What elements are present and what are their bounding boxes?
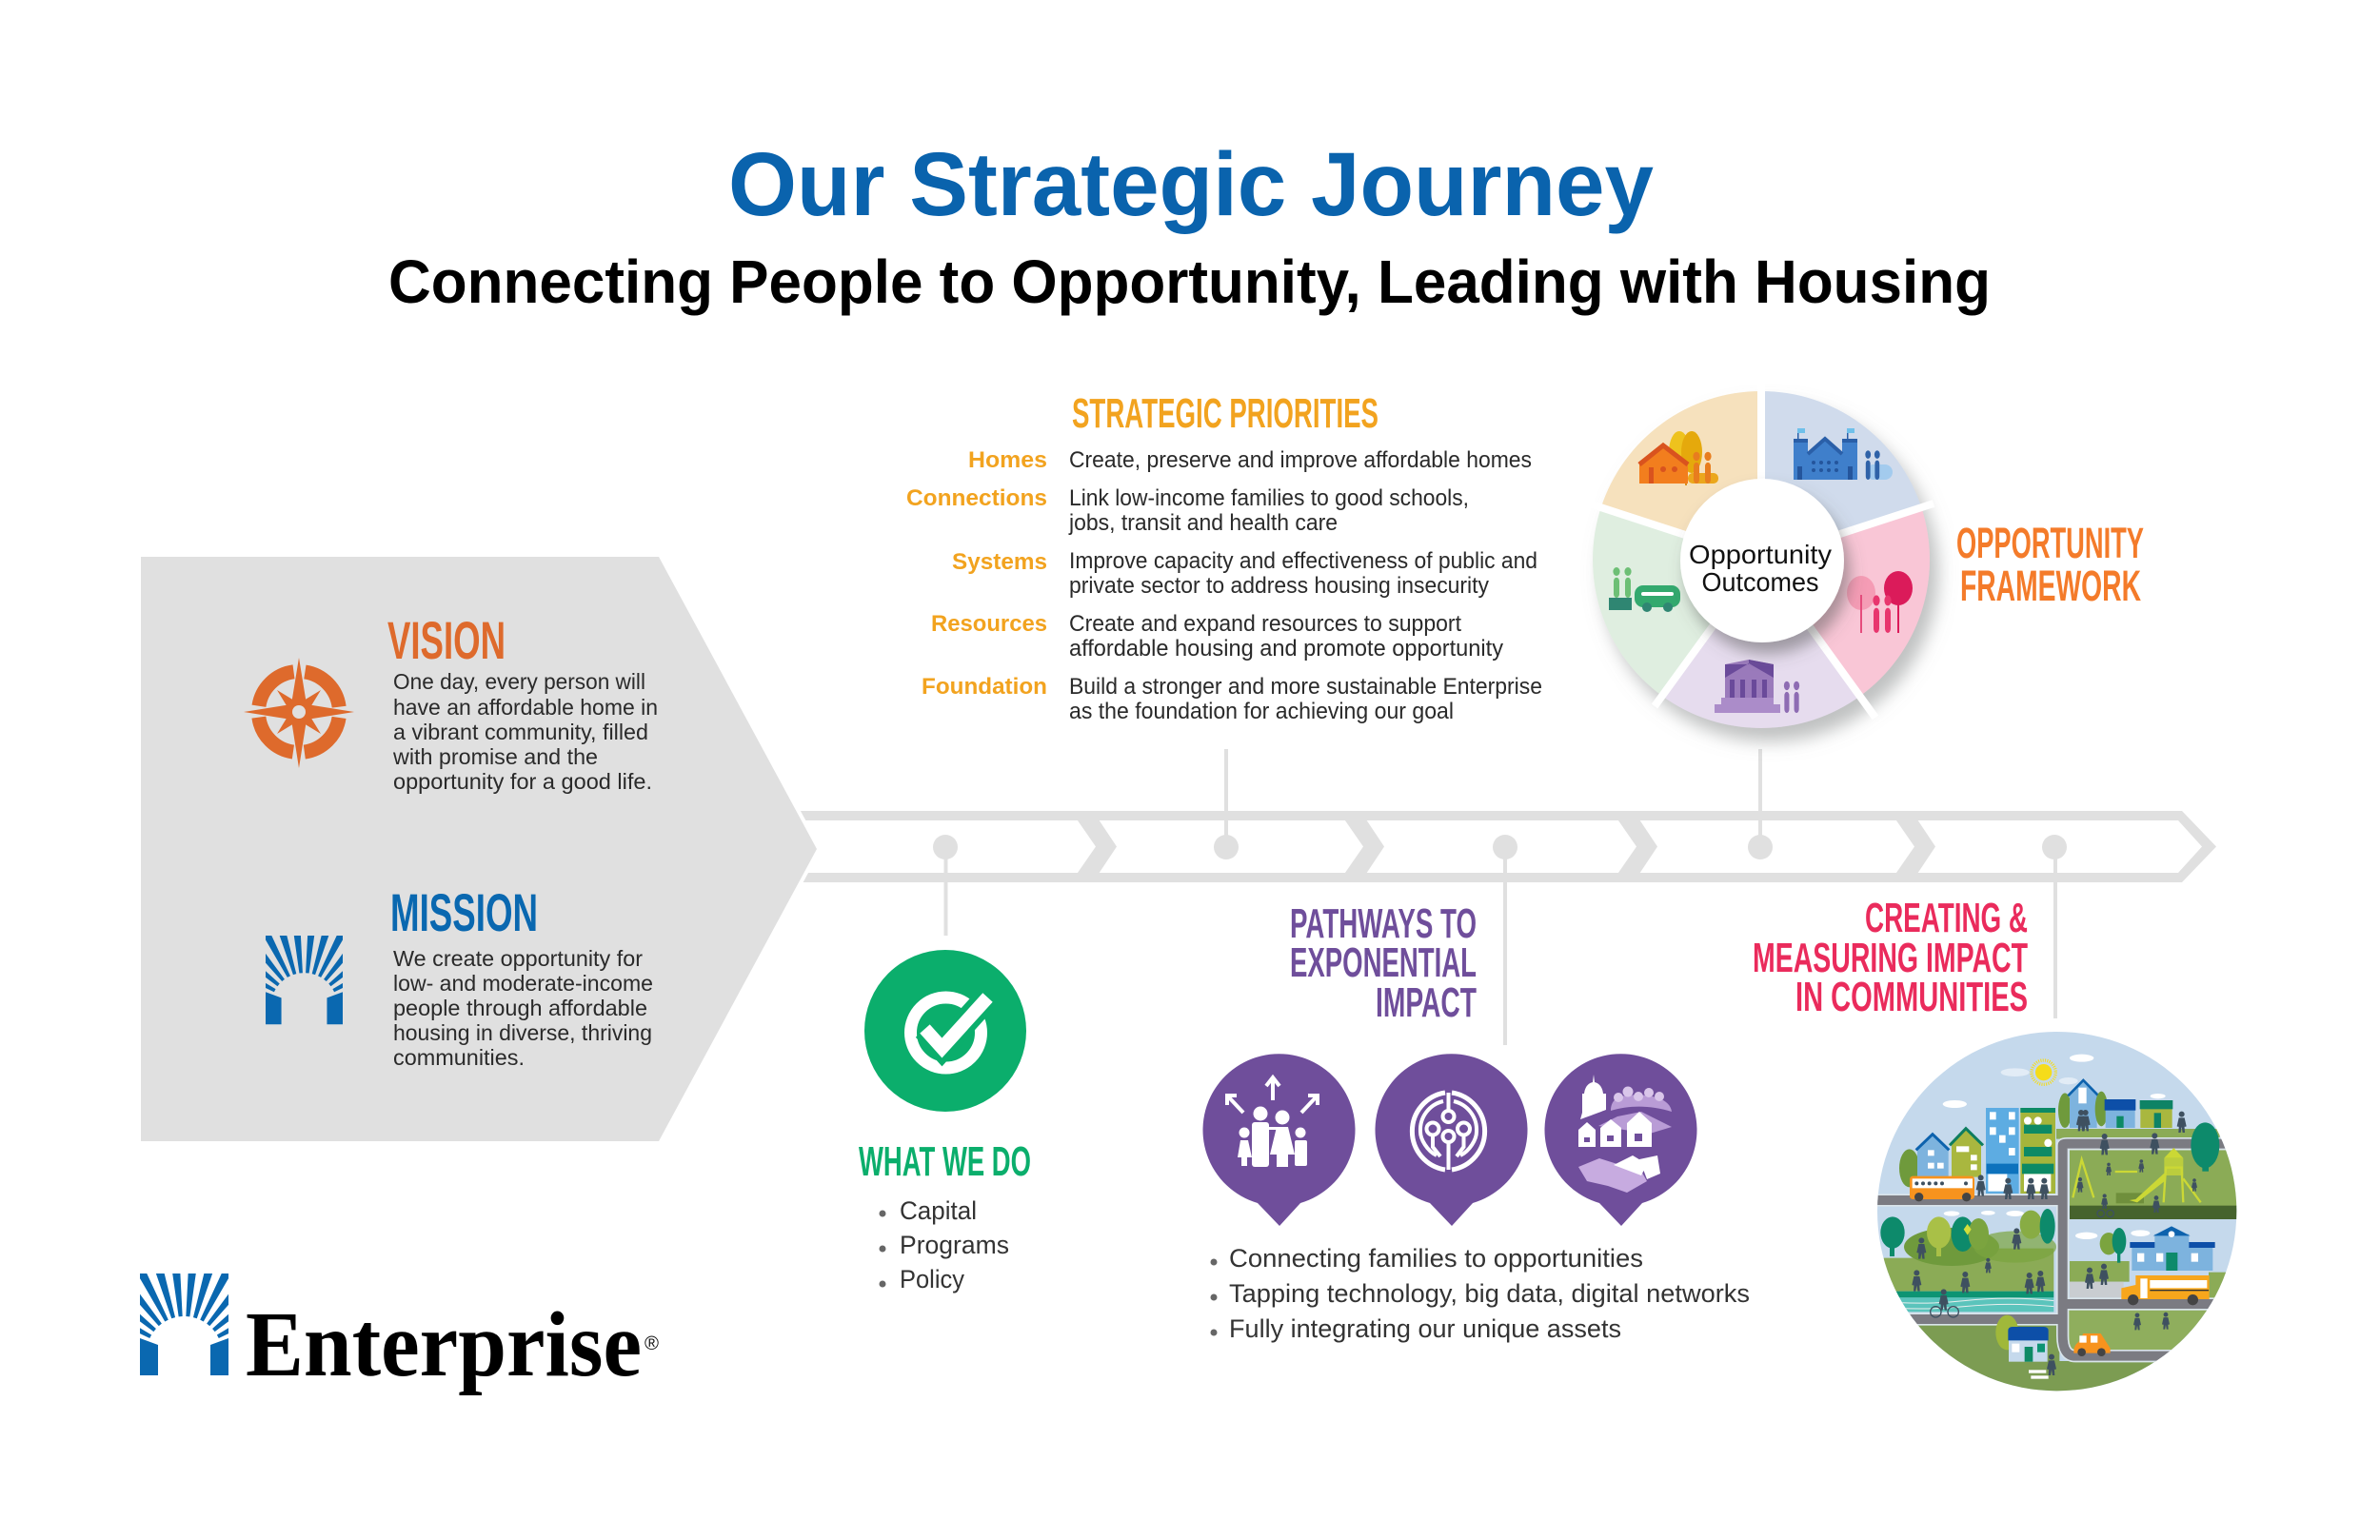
text: mission: low- and moderate-income: [393, 971, 653, 996]
list: pathways: Tapping technology, big data, digital networks: [1229, 1279, 1750, 1308]
school and bus: [2100, 1226, 2215, 1305]
heading: pathways to exponential impact: [1290, 900, 1477, 1026]
priority labels: Systems: [952, 549, 1047, 575]
priority descriptions: Create, preserve and improve affordable homes: [1069, 447, 1532, 473]
roads: [1875, 1144, 2240, 1356]
icon: circuit: [1412, 1093, 1485, 1170]
heading: opportunity framework: OPPORTUNITY: [1956, 519, 2144, 567]
icon: enterprise arch small: [191, 881, 417, 1024]
priority descriptions: jobs, transit and health care: [1068, 510, 1338, 536]
top houses: [2058, 1080, 2219, 1172]
heading: what we do: WHAT WE DO: [859, 1138, 1031, 1185]
panel: vision and mission: [141, 557, 817, 1141]
list: what we do: [880, 1196, 1009, 1293]
text: mission: people through affordable: [393, 996, 647, 1020]
park and playground: [2073, 1148, 2201, 1203]
heading: opportunity framework: [1956, 519, 2144, 610]
heading: opportunity framework: FRAMEWORK: [1960, 562, 2141, 610]
priority descriptions: Improve capacity and effectiveness of public and: [1069, 548, 1537, 574]
list: what we do: Capital: [900, 1196, 977, 1225]
priority descriptions: Create and expand resources to support: [1069, 611, 1461, 637]
icon: capitol crowd homes handshake: [1578, 1075, 1672, 1193]
logo mark: [55, 1212, 313, 1375]
priority labels: [906, 447, 1047, 700]
text: vision: opportunity for a good life.: [393, 769, 652, 794]
logo wordmark: Enterprise: [246, 1293, 642, 1395]
text: mission: [393, 946, 653, 1070]
priority labels: Foundation: [922, 674, 1047, 700]
text: vision: with promise and the: [392, 744, 598, 769]
heading: pathways to exponential impact: EXPONENTIAL: [1290, 939, 1477, 986]
street bus: [1910, 1176, 1974, 1201]
section: what we do: [859, 1138, 1031, 1293]
text: vision: have an affordable home in: [393, 695, 658, 720]
section: strategic priorities: [906, 390, 1542, 724]
icon: bank: [1715, 660, 1799, 713]
priority labels: Resources: [931, 611, 1047, 637]
icon: home: [1639, 431, 1718, 485]
riverside park: [1875, 1209, 2056, 1309]
text: mission: housing in diverse, thriving: [393, 1020, 652, 1045]
title: Our Strategic Journey: [728, 134, 1654, 235]
heading: strategic priorities: STRATEGIC PRIORITIES: [1072, 390, 1378, 437]
wheel center label: Opportunity: [1689, 540, 1832, 569]
sun and clouds: [1943, 1055, 2166, 1239]
wheel center label: [1689, 540, 1832, 597]
priority descriptions: as the foundation for achieving our goal: [1069, 699, 1454, 724]
priority labels: Homes: [968, 447, 1047, 473]
list: what we do: Policy: [900, 1265, 964, 1293]
priority descriptions: [1068, 447, 1542, 724]
pin: integrating assets: [1545, 1054, 1697, 1226]
heading: creating and measuring impact: CREATING &: [1865, 895, 2028, 941]
priority descriptions: Build a stronger and more sustainable Enterprise: [1069, 674, 1542, 700]
icon: family with arrows: [1227, 1077, 1318, 1167]
icon: compass: [244, 658, 354, 768]
priority labels: Connections: [906, 485, 1047, 511]
heading: pathways to exponential impact: IMPACT: [1376, 979, 1477, 1026]
wheel center label: Outcomes: [1702, 567, 1818, 597]
heading: creating and measuring impact: [1753, 895, 2028, 1020]
timeline nodes and connectors: [933, 749, 2067, 1045]
illustration: community scene: [1875, 1031, 2241, 1392]
icon: school: [1794, 428, 1893, 480]
list: pathways: Fully integrating our unique assets: [1229, 1314, 1621, 1343]
text: mission: We create opportunity for: [393, 946, 643, 971]
pin: connecting families: [1202, 1054, 1356, 1226]
priority descriptions: private sector to address housing insecurity: [1069, 573, 1489, 599]
heading: creating and measuring impact: MEASURING IMPACT: [1753, 935, 2028, 981]
text: vision: [392, 669, 658, 794]
icon: trees and people: [1847, 571, 1913, 633]
text: vision: a vibrant community, filled: [393, 720, 648, 744]
left street buildings: [1899, 1108, 2055, 1194]
people: [1912, 1110, 2197, 1375]
heading: mission: MISSION: [390, 882, 538, 942]
priority descriptions: affordable housing and promote opportunity: [1069, 636, 1503, 661]
list: pathways: Connecting families to opportunities: [1229, 1244, 1643, 1273]
ground blocks: [1875, 1129, 2241, 1392]
list: pathways: [1211, 1244, 1750, 1343]
heading: vision: VISION: [387, 610, 506, 670]
heading: creating and measuring impact: IN COMMUNITIES: [1795, 974, 2028, 1020]
subtitle: Connecting People to Opportunity, Leading with Housing: [388, 247, 1991, 316]
text: vision: One day, every person will: [393, 669, 645, 694]
timeline arrow band: [790, 811, 2216, 882]
pin: technology: [1375, 1054, 1528, 1226]
icon: transit: [1609, 567, 1680, 612]
priority descriptions: Link low-income families to good schools,: [1069, 485, 1469, 511]
logo: enterprise: [55, 1212, 659, 1395]
heading: pathways to exponential impact: PATHWAYS TO: [1290, 900, 1477, 947]
list: what we do: Programs: [900, 1231, 1009, 1259]
registered mark: ®: [645, 1333, 659, 1354]
icon: what we do check: [864, 950, 1026, 1112]
bottom house and car: [1995, 1315, 2111, 1379]
text: mission: communities.: [393, 1045, 525, 1070]
opportunity outcomes wheel: [1589, 379, 1934, 728]
